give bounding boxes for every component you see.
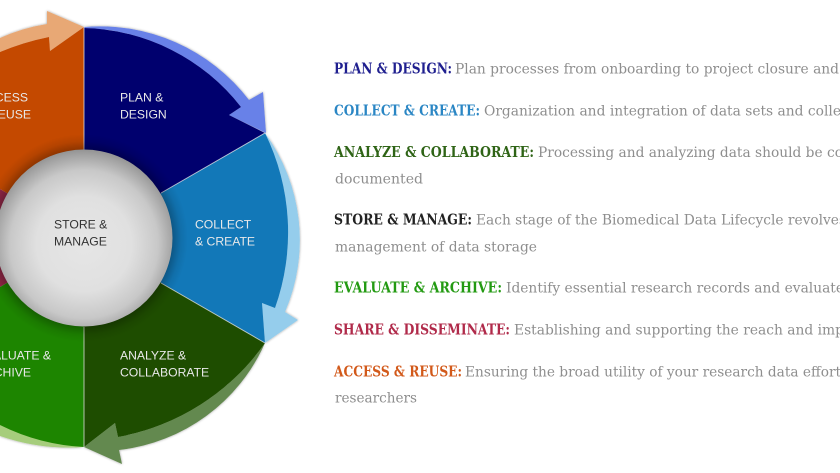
definition: share and disseminate	[334, 322, 840, 338]
center circle: store and manage	[0, 150, 172, 326]
definition: collect and create: COLLECT & CREATE:	[334, 102, 480, 120]
inner shadow ring	[0, 134, 188, 342]
label: store and manage: MANAGE	[54, 234, 107, 248]
label: collect and create: & CREATE	[195, 234, 255, 248]
segment dividers	[84, 27, 265, 447]
definition: analyze and collaborate: ANALYZE & COLLABORATE:	[333, 144, 534, 161]
arrow: blue plan arrow	[84, 26, 266, 133]
segment: evaluate and archive	[0, 238, 84, 447]
definition: evaluate and archive: EVALUATE & ARCHIVE:	[334, 280, 502, 296]
definition: analyze and collaborate	[333, 144, 840, 188]
definition: analyze and collaborate: Processing and analyzing data should be co	[538, 145, 840, 161]
definition: plan and design: PLAN & DESIGN:	[334, 60, 452, 78]
definition: store and manage	[334, 212, 840, 256]
arrow: light green evaluate arrow	[0, 424, 84, 448]
label: analyze and collaborate: COLLABORATE	[120, 366, 209, 380]
lifecycle wheel diagram	[0, 11, 300, 464]
definition: access and reuse: ACCESS & REUSE:	[333, 364, 462, 380]
definition: store and manage: STORE & MANAGE:	[334, 212, 472, 228]
segment: share and disseminate	[0, 189, 84, 287]
definition: evaluate and archive	[334, 280, 840, 296]
definition: plan and design: Plan processes from onboarding to project closure and	[455, 62, 839, 78]
definition: share and disseminate: SHARE & DISSEMINATE:	[334, 322, 510, 338]
definition: collect and create: Organization and integration of data sets and colle	[484, 104, 840, 120]
definition: access and reuse: researchers	[335, 390, 417, 406]
definition: access and reuse	[333, 364, 840, 406]
arrow: dark green analyze arrow	[84, 343, 265, 464]
arrow: light blue collect arrow	[262, 133, 300, 343]
definitions text block	[333, 60, 840, 406]
definition: store and manage: management of data storage	[335, 240, 537, 256]
label: plan and design: DESIGN	[120, 108, 167, 122]
arrow: orange access arrow	[0, 11, 84, 52]
label: plan and design: PLAN &	[120, 90, 163, 104]
segment: access and reuse	[0, 27, 84, 238]
label: store and manage: STORE &	[54, 218, 107, 232]
segment: analyze and collaborate	[84, 238, 265, 447]
definition: analyze and collaborate: documented	[335, 172, 423, 188]
definition: access and reuse: Ensuring the broad utility of your research data effort	[465, 364, 840, 380]
definition: evaluate and archive: Identify essential research records and evaluate	[506, 280, 840, 296]
label: collect and create: COLLECT	[195, 218, 252, 232]
label: analyze and collaborate: ANALYZE &	[120, 348, 186, 362]
segment: plan and design	[84, 28, 265, 238]
definition: collect and create	[334, 102, 840, 120]
segment: collect and create	[84, 133, 288, 343]
definition: share and disseminate: Establishing and supporting the reach and imp	[514, 322, 840, 338]
